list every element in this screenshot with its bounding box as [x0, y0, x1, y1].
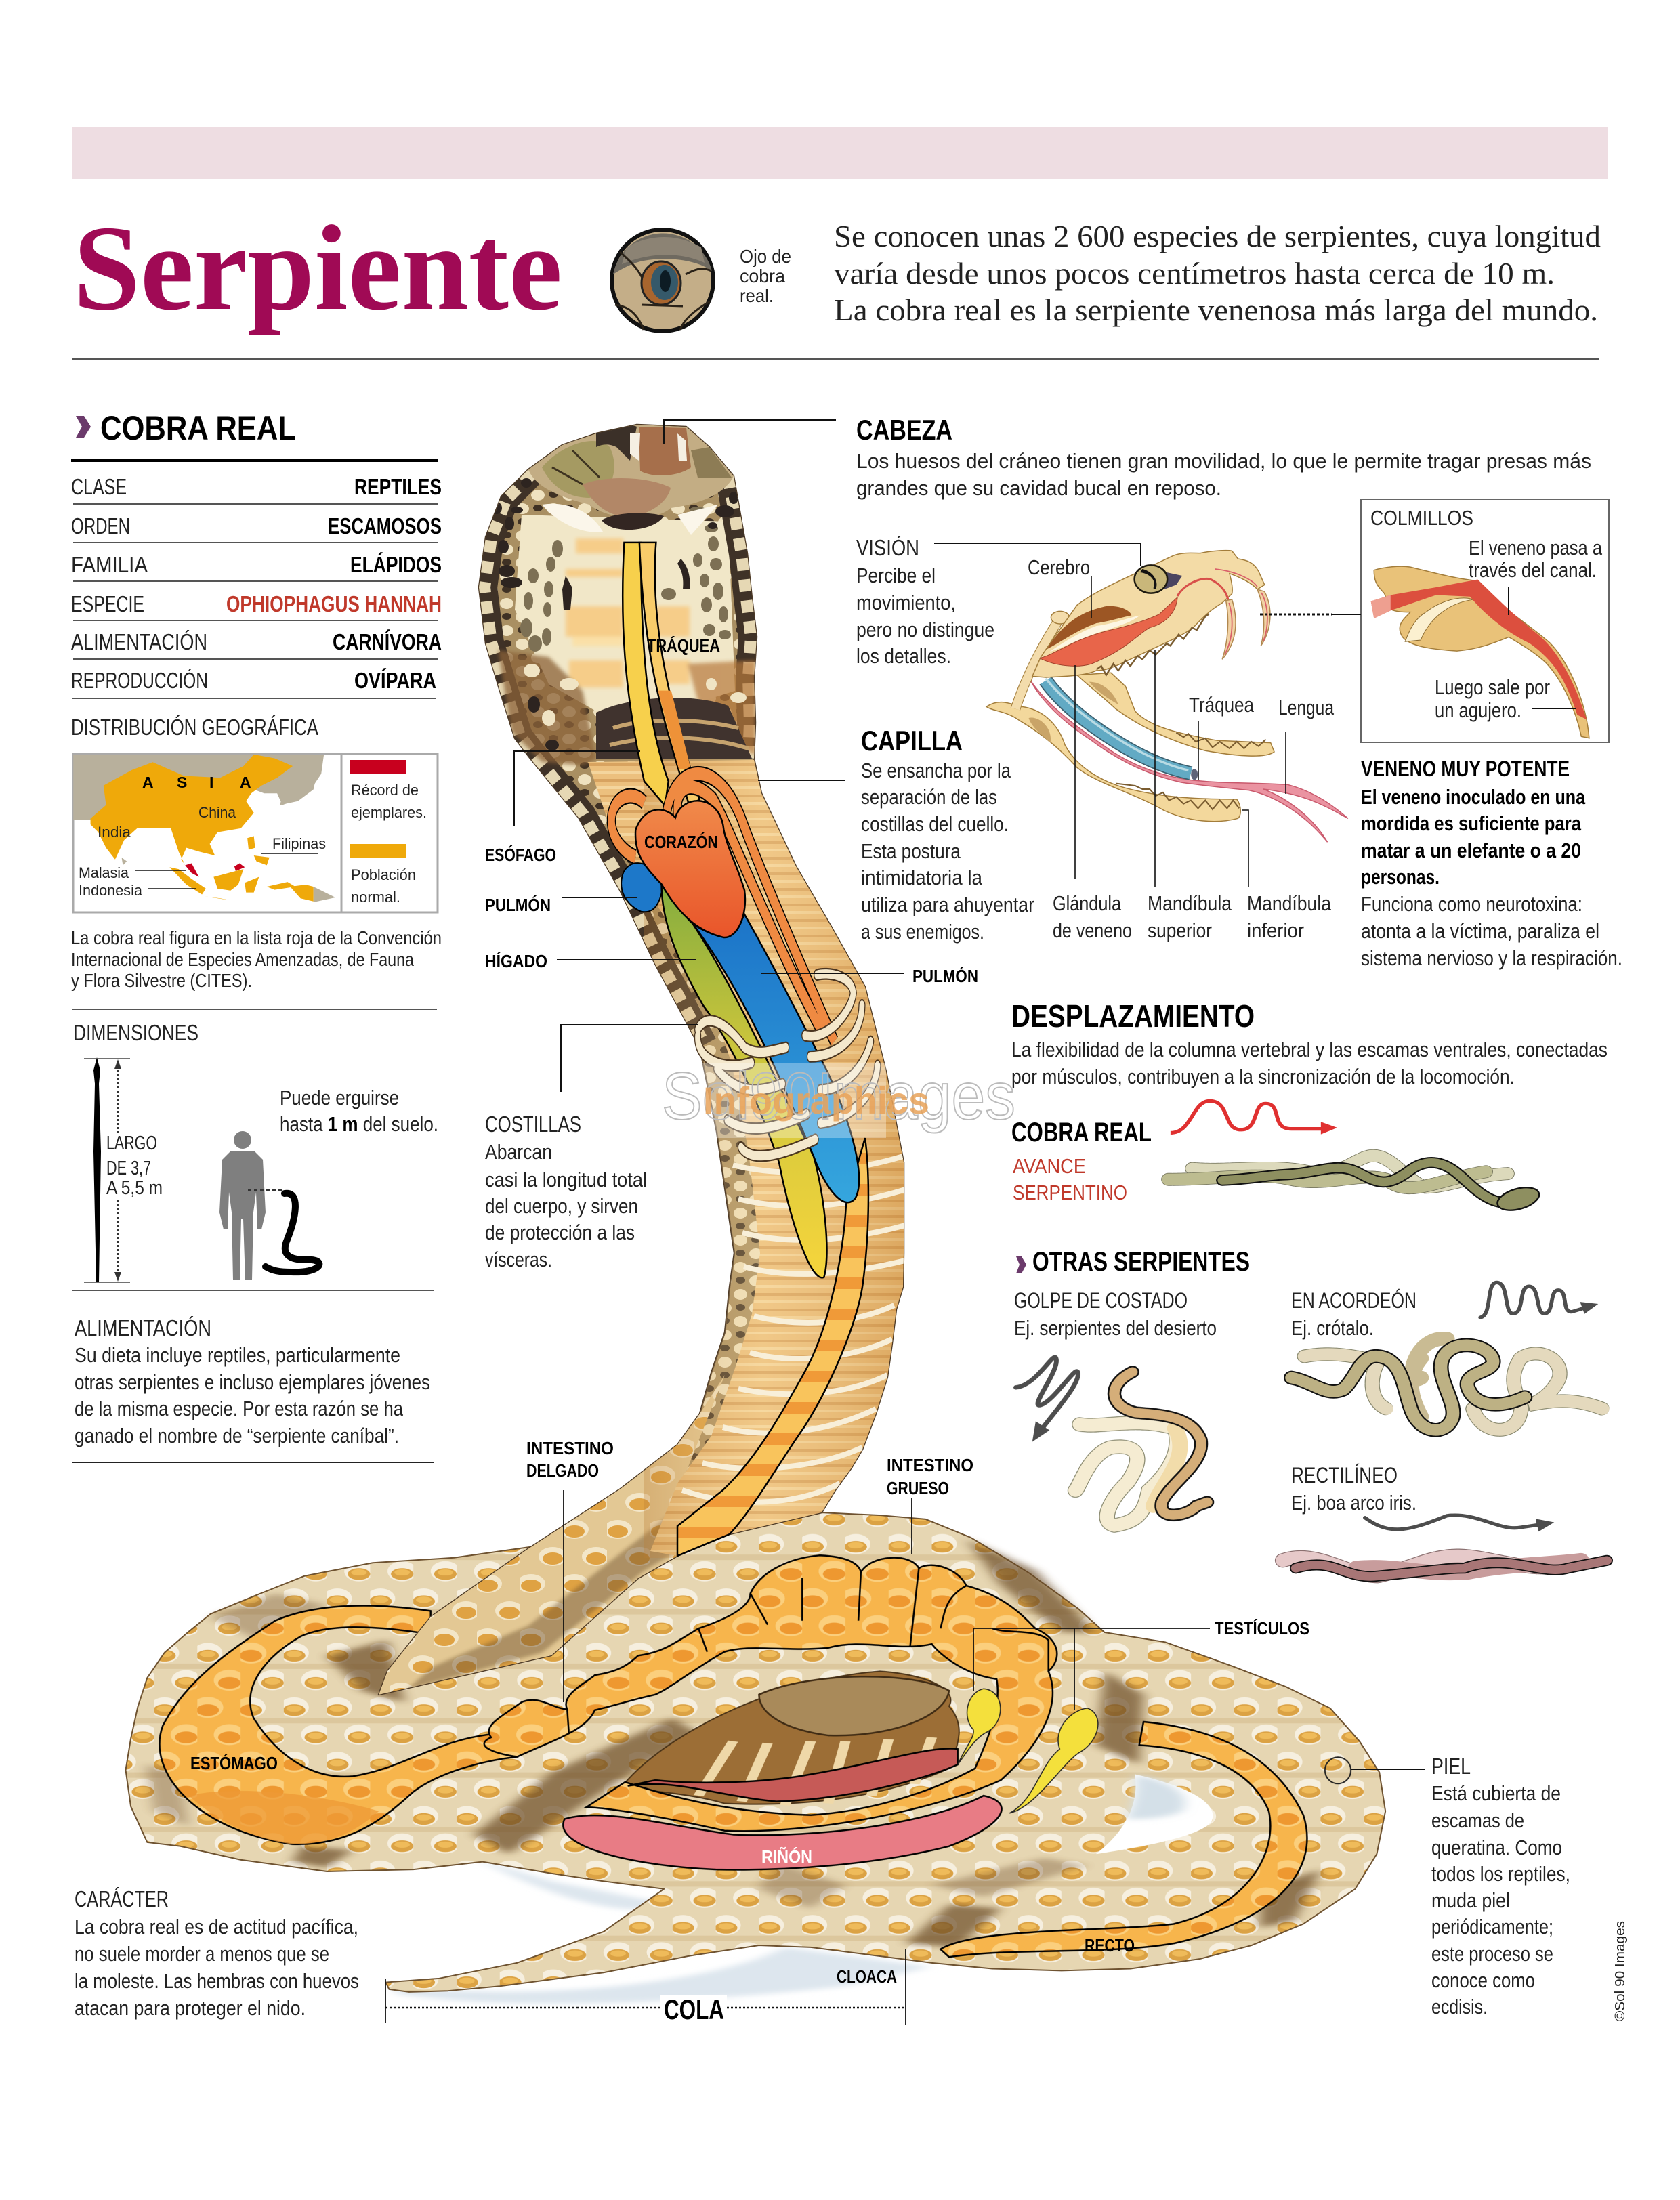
length label: DE 3,7: [106, 1158, 151, 1179]
text block: costillas: casi la longitud total: [485, 1168, 647, 1191]
organs: [611, 543, 877, 1277]
kidneys: [563, 1748, 1002, 1869]
map labels: I: [209, 774, 213, 791]
ghost snake: [1076, 1423, 1180, 1525]
hood yellow bands: [566, 538, 690, 688]
main snake: [1114, 1372, 1207, 1515]
text block: piel: [1431, 1754, 1570, 2018]
text block: piel: ecdisis.: [1431, 1995, 1488, 2018]
crease under neck: [407, 1518, 673, 1688]
arrow: rectilinear: [1365, 1515, 1554, 1531]
text block: piel: este proceso se: [1431, 1942, 1553, 1966]
coil labels: RECTO: [1085, 1935, 1135, 1955]
text block: caracter: la moleste. Las hembras con huevos: [75, 1969, 359, 1993]
row: reproduccion: OVÍPARA: [354, 668, 436, 693]
main snake: [1291, 1345, 1525, 1430]
row: clase: REPTILES: [354, 474, 442, 499]
text block: piel: Está cubierta de: [1431, 1781, 1561, 1805]
text block: alimentacion: [75, 1315, 430, 1447]
text block: piel: conoce como: [1431, 1968, 1535, 1992]
text block: piel: PIEL: [1431, 1754, 1471, 1779]
text block: veneno: El veneno inoculado en una: [1361, 785, 1586, 809]
leader: cabeza: [664, 420, 836, 444]
text block: costillas: vísceras.: [485, 1248, 552, 1271]
intro text: varía desde unos pocos centímetros hasta cerca de 10 m.: [834, 256, 1555, 291]
coil labels: ESTÓMAGO: [190, 1753, 278, 1773]
panel: cobra real locomotion: COBRA REAL: [1011, 1118, 1152, 1147]
icon: human silhouette: [219, 1131, 266, 1280]
belly plates: [588, 760, 904, 1556]
hood lower brown mottling: [498, 650, 596, 765]
caption: [280, 1086, 438, 1136]
panel: golpe de costado: [1014, 1288, 1217, 1525]
row: alimentacion: CARNÍVORA: [333, 629, 442, 654]
hood dark marks: [491, 478, 738, 610]
ghost snakes: [1305, 1338, 1603, 1430]
eye caption: real.: [740, 285, 774, 306]
coil labels: [190, 1438, 1309, 1987]
coil labels: RIÑÓN: [761, 1846, 812, 1867]
esophagus: [623, 543, 669, 805]
text block: cabeza: CABEZA: [856, 414, 952, 446]
cobra scale bar: [93, 1057, 101, 1282]
skull labels: Cerebro: [1028, 555, 1090, 579]
snake group: [1169, 1101, 1542, 1214]
body outline: [125, 1512, 1385, 1992]
text block: capilla: utiliza para ahuyentar: [861, 893, 1034, 916]
text block: caracter: atacan para proteger el nido.: [75, 1996, 306, 2020]
coil labels: DELGADO: [526, 1460, 599, 1481]
panel: rectilineo: RECTILÍNEO: [1291, 1463, 1398, 1487]
credit: ©Sol 90 Images: [1613, 1921, 1628, 2021]
stomach: [159, 1606, 517, 1844]
skull labels: superior: [1148, 918, 1212, 942]
text block: vision: VISIÓN: [856, 535, 919, 560]
row: orden: ORDEN: [71, 513, 130, 538]
leader: piel: [1351, 1769, 1425, 1770]
row: clase: CLASE: [71, 474, 127, 499]
text block: piel: escamas de: [1431, 1808, 1524, 1832]
text block: veneno: [1361, 757, 1622, 970]
text block: veneno: mordida es suficiente para: [1361, 811, 1582, 835]
text block: capilla: separación de las: [861, 785, 997, 809]
skull labels: Mandíbula: [1247, 891, 1332, 915]
forebody silhouette: [379, 425, 904, 1695]
ghost snakes: [1169, 1156, 1507, 1188]
text block: veneno: sistema nervioso y la respiración.: [1361, 946, 1622, 970]
teeth: [1097, 614, 1209, 675]
fang illustration: [1371, 566, 1589, 738]
ribs: [698, 974, 877, 1156]
row: alimentacion: ALIMENTACIÓN: [71, 629, 207, 654]
upper jaw: [1077, 673, 1274, 756]
map legend: ejemplares.: [351, 804, 427, 821]
row: familia: FAMILIA: [71, 552, 148, 577]
text block: alimentacion: Su dieta incluye reptiles, particularmente: [75, 1343, 400, 1367]
row: familia: ELÁPIDOS: [350, 552, 442, 577]
map labels: Malasia: [79, 864, 129, 881]
text block: alimentacion: ganado el nombre de “serpiente caníbal”.: [75, 1424, 399, 1447]
coil labels: GRUESO: [887, 1478, 949, 1498]
text block: capilla: Se ensancha por la: [861, 759, 1011, 782]
text block: veneno: atonta a la víctima, paraliza el: [1361, 919, 1599, 943]
text block: vision: pero no distingue: [856, 618, 994, 641]
panel: dimensiones: [73, 1020, 438, 1282]
text: CITES note: La cobra real figura en la lista roja de la Convención: [71, 927, 442, 948]
arrow: red wave: [1171, 1101, 1337, 1135]
panel: cobra real locomotion: AVANCE: [1013, 1154, 1086, 1178]
text block: capilla: costillas del cuello.: [861, 812, 1009, 836]
skull labels: [1028, 555, 1335, 942]
map legend: Récord de: [351, 782, 419, 799]
text block: costillas: de protección a las: [485, 1221, 635, 1244]
skull illustration: [986, 551, 1348, 842]
lower jaw: [986, 702, 1240, 822]
hood pale base: [515, 515, 735, 711]
dark neck band: [596, 698, 752, 759]
skull: [1032, 551, 1265, 677]
loop hole: [1096, 1774, 1213, 1854]
panel: en acordeon: Ej. crótalo.: [1291, 1316, 1374, 1340]
caption: Puede erguirse: [280, 1086, 399, 1109]
connector: fang to panel: [1260, 614, 1332, 615]
text block: cabeza: Los huesos del cráneo tienen gran movilidad, lo que le permite tragar presas más: [856, 449, 1591, 473]
text block: desplazamiento: [1011, 998, 1608, 1088]
text: CITES note: Internacional de Especies Amenzadas, de Fauna: [71, 949, 414, 970]
main snake: [1222, 1162, 1542, 1214]
neck leaders: [514, 751, 904, 1092]
row: reproduccion: REPRODUCCIÓN: [71, 668, 208, 693]
panel: dimensiones: DIMENSIONES: [73, 1020, 198, 1045]
text block: capilla: CAPILLA: [861, 725, 963, 757]
upper teeth: [1176, 733, 1266, 748]
panel: rectilineo: Ej. boa arco iris.: [1291, 1491, 1416, 1515]
text block: capilla: intimidatoria la: [861, 866, 983, 889]
row: alimentacion: [71, 629, 442, 654]
ground shadows: [396, 1858, 932, 2004]
neck labels: PULMÓN: [912, 966, 978, 986]
map panel: [73, 754, 438, 912]
row: reproduccion: [71, 668, 436, 693]
text block: piel: muda piel: [1431, 1888, 1510, 1912]
length label: [105, 1133, 166, 1200]
lower teeth: [1116, 784, 1239, 809]
dimension arrow: [84, 1059, 130, 1282]
map labels: China: [198, 804, 236, 821]
map legend: Población: [351, 866, 416, 883]
text block: desplazamiento: por músculos, contribuyen a la sincronización de la locomoción.: [1011, 1065, 1515, 1088]
right lung: [692, 914, 859, 1202]
left lung: [621, 863, 663, 912]
inner coil: [621, 1671, 959, 1804]
text block: alimentacion: de la misma especie. Por esta razón se ha: [75, 1397, 404, 1420]
fangs: [1215, 569, 1270, 659]
panel: en acordeon: [1291, 1282, 1603, 1430]
rectum: [940, 1722, 1307, 1957]
intro text: La cobra real es la serpiente venenosa más larga del mundo.: [834, 293, 1598, 327]
text block: veneno: matar a un elefante o a 20: [1361, 839, 1581, 862]
icon: small cobra: [248, 1190, 319, 1272]
eye caption: Ojo de: [740, 246, 791, 267]
watermark: Sol90Images: [662, 1059, 1015, 1133]
caption: hasta 1 m del suelo.: [280, 1112, 438, 1136]
tongue: [1030, 679, 1348, 842]
text: CITES note: [71, 927, 442, 991]
map labels: A: [142, 774, 154, 791]
panel: colmillos: través del canal.: [1469, 558, 1597, 582]
hood spots: [520, 507, 731, 652]
illustration: hood and neck: [379, 425, 908, 1695]
arrow: sidewinding: [1016, 1357, 1078, 1442]
venom duct: [1177, 578, 1228, 601]
neck labels: TRÁQUEA: [647, 635, 720, 656]
heading: COBRA REAL: [100, 409, 296, 447]
skull labels: Tráquea: [1189, 693, 1255, 717]
skull labels: Mandíbula: [1148, 891, 1232, 915]
icon: snake eye photo: [612, 230, 713, 331]
brain: [1047, 606, 1131, 649]
intestinal tube: [677, 1138, 868, 1556]
text block: piel: todos los reptiles,: [1431, 1862, 1570, 1886]
skull labels: Lengua: [1278, 696, 1335, 719]
map labels: S: [177, 774, 187, 791]
windpipe: [1046, 679, 1198, 780]
piel marker: [1325, 1757, 1351, 1783]
belly plate seams: [682, 1155, 908, 1502]
trachea: [639, 543, 700, 805]
icon: chevron: [76, 416, 91, 438]
top colour banner: [72, 127, 1608, 179]
heart: [635, 801, 745, 937]
head top shapes: [528, 425, 734, 517]
text block: caracter: [75, 1886, 359, 2020]
text block: caracter: La cobra real es de actitud pacífica,: [75, 1915, 358, 1939]
panel: colmillos: Luego sale por: [1435, 675, 1550, 699]
panel: colmillos: El veneno pasa a: [1469, 536, 1603, 559]
panel: colmillos: un agujero.: [1435, 698, 1521, 722]
small and large intestine: [484, 1555, 1057, 1831]
leader: vision: [934, 543, 1141, 566]
text block: veneno: Funciona como neurotoxina:: [1361, 892, 1582, 916]
text block: costillas: COSTILLAS: [485, 1112, 581, 1137]
eye caption: [740, 246, 791, 306]
main snake: [1296, 1561, 1607, 1576]
map labels: A: [240, 774, 251, 791]
text block: vision: [856, 535, 994, 668]
text: CITES note: y Flora Silvestre (CITES).: [71, 970, 252, 991]
intro text: [834, 219, 1601, 327]
coil labels: TESTÍCULOS: [1215, 1618, 1309, 1638]
panel: rectilineo: [1283, 1463, 1607, 1576]
text block: cabeza: grandes que su cavidad bucal en reposo.: [856, 476, 1221, 500]
row: especie: [71, 591, 442, 616]
panel: cobra real locomotion: SERPENTINO: [1013, 1181, 1127, 1204]
hood rim chain: [479, 440, 757, 1047]
map labels: [79, 774, 326, 899]
panel: colmillos: [1361, 499, 1609, 742]
text block: caracter: no suele morder a menos que se: [75, 1942, 329, 1966]
map labels: India: [98, 824, 131, 841]
row: orden: [71, 513, 442, 538]
text block: vision: los detalles.: [856, 644, 951, 668]
neck labels: HÍGADO: [485, 951, 547, 971]
coil labels: INTESTINO: [887, 1455, 973, 1475]
text block: piel: periódicamente;: [1431, 1915, 1553, 1939]
testicles: [958, 1689, 1098, 1813]
intro text: Se conocen unas 2 600 especies de serpientes, cuya longitud: [834, 219, 1601, 253]
text block: costillas: del cuerpo, y sirven: [485, 1194, 638, 1218]
text block: vision: movimiento,: [856, 591, 956, 614]
leader: capilla: [758, 780, 845, 781]
text block: capilla: a sus enemigos.: [861, 920, 984, 944]
text block: vision: Percibe el: [856, 564, 936, 587]
title: Serpiente: [73, 200, 562, 335]
neck labels: PULMÓN: [485, 895, 551, 915]
eye: [1135, 565, 1182, 593]
skull labels: Glándula: [1053, 891, 1122, 915]
skull labels: de veneno: [1053, 918, 1132, 942]
neck labels: CORAZÓN: [644, 832, 718, 852]
tail measure: COLA: [664, 1993, 724, 2025]
text block: caracter: CARÁCTER: [75, 1886, 169, 1911]
tail measure: [385, 1993, 906, 2025]
heading: distribucion geografica: DISTRIBUCIÓN GEOGRÁFICA: [71, 715, 318, 740]
row: especie: OPHIOPHAGUS HANNAH: [226, 591, 442, 616]
text block: capilla: [861, 725, 1034, 944]
coil labels: CLOACA: [837, 1966, 897, 1987]
text block: costillas: Abarcan: [485, 1140, 552, 1164]
panel: golpe de costado: Ej. serpientes del desierto: [1014, 1316, 1217, 1340]
map labels: Filipinas: [272, 835, 326, 852]
neck labels: ESÓFAGO: [485, 845, 556, 865]
map legend: [350, 760, 427, 906]
row: orden: ESCAMOSOS: [328, 513, 442, 538]
liver: [662, 884, 826, 1277]
panel: cobra real locomotion: [1011, 1101, 1542, 1214]
dark mottled creases: [146, 1539, 1320, 1947]
text block: alimentacion: otras serpientes e incluso ejemplares jóvenes: [75, 1370, 430, 1394]
venom gland: [1040, 597, 1177, 666]
row: especie: ESPECIE: [71, 591, 144, 616]
panel: en acordeon: EN ACORDEÓN: [1291, 1288, 1416, 1313]
map shapes: [73, 755, 335, 902]
length label: A 5,5 m: [106, 1177, 163, 1199]
panel: colmillos: COLMILLOS: [1370, 506, 1473, 530]
map legend: normal.: [351, 889, 400, 906]
neck labels: [485, 635, 978, 986]
text block: desplazamiento: DESPLAZAMIENTO: [1011, 998, 1255, 1034]
panel: golpe de costado: GOLPE DE COSTADO: [1014, 1288, 1188, 1313]
skull labels: inferior: [1247, 918, 1304, 942]
length label: LARGO: [106, 1133, 157, 1154]
aortic arcs: [611, 774, 835, 1042]
quadrate bone: [1015, 611, 1070, 709]
tail end of neck back: [379, 1375, 725, 1695]
coil leaders: [385, 1490, 1210, 2025]
heading: otras serpientes: OTRAS SERPIENTES: [1032, 1247, 1250, 1277]
illustration: coiled body: [125, 1512, 1385, 2004]
text block: cabeza: [856, 414, 1591, 500]
watermark: Infographics: [703, 1079, 929, 1122]
text block: veneno: VENENO MUY POTENTE: [1361, 757, 1570, 781]
text block: piel: queratina. Como: [1431, 1836, 1562, 1859]
panel: COBRA REAL taxonomy: [71, 409, 442, 698]
ghost snake: [1283, 1556, 1581, 1576]
text block: veneno: personas.: [1361, 865, 1440, 889]
row: clase: [71, 474, 442, 499]
map labels: Indonesia: [79, 882, 143, 899]
row: familia: [71, 552, 442, 577]
text block: capilla: Esta postura: [861, 839, 961, 863]
text block: costillas: [485, 1112, 647, 1271]
arrow: accordion: [1480, 1282, 1598, 1317]
text block: alimentacion: ALIMENTACIÓN: [75, 1315, 211, 1340]
eye caption: cobra: [740, 266, 785, 287]
coil labels: INTESTINO: [526, 1438, 614, 1458]
